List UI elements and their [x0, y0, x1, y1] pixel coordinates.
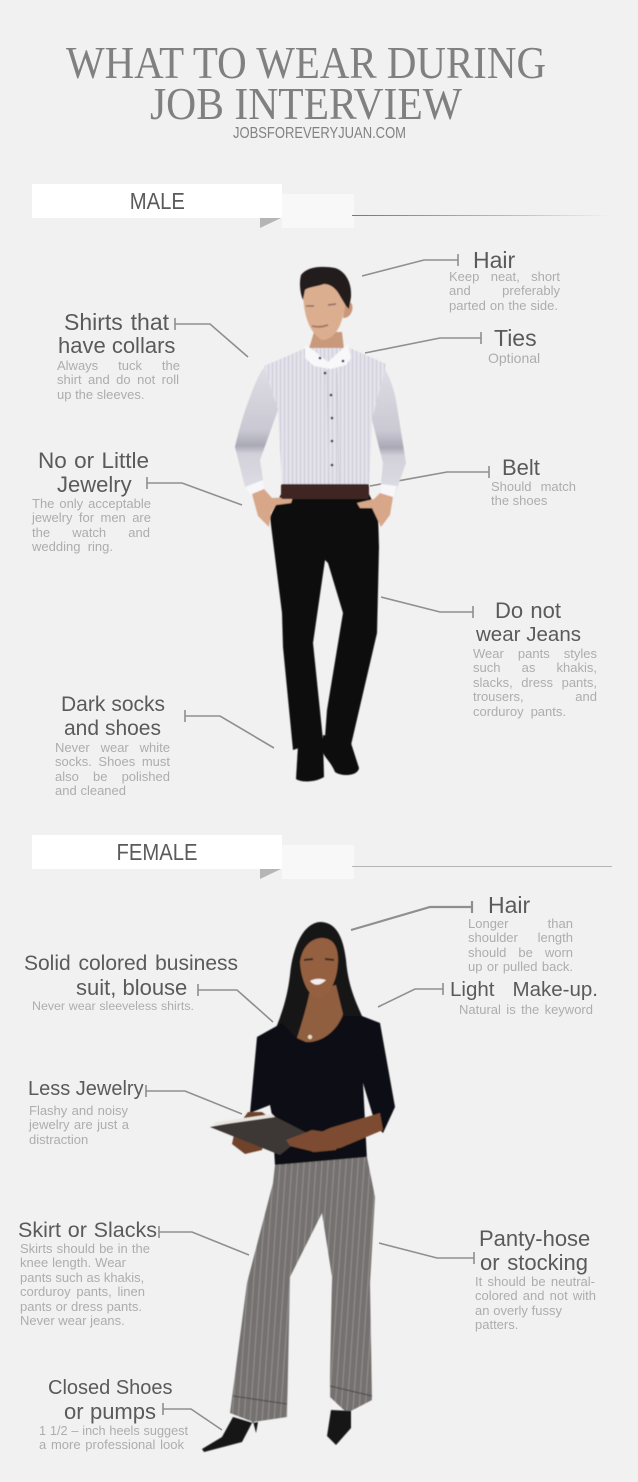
callout: male jewelry: jewelry for men are: [32, 510, 151, 525]
callout: male jeans: Do not: [495, 598, 561, 623]
callout: male socks: Dark socks: [61, 693, 165, 716]
section ribbon: female: FEMALE: [117, 839, 197, 865]
female figure: [202, 921, 396, 1453]
callout: male ties: [488, 325, 540, 366]
callout: female hosiery: patters.: [475, 1317, 518, 1332]
left sleeve: [235, 362, 284, 497]
face: [300, 938, 338, 998]
section ribbon: male: [32, 184, 596, 228]
smile: [310, 979, 326, 985]
callout: female skirt: pants or dress pants.: [20, 1299, 142, 1314]
buttons: [319, 357, 344, 466]
callout: female hair: up or pulled back.: [468, 959, 573, 974]
left hand: [232, 1112, 270, 1154]
face: [303, 283, 346, 340]
callout: male jewelry: Jewelry: [57, 472, 132, 497]
back hair: [268, 922, 362, 1076]
callout: female hosiery: or stocking: [480, 1250, 588, 1275]
belt: [281, 484, 369, 499]
callout: male belt: [491, 455, 576, 508]
callout: male belt: Belt: [502, 455, 540, 480]
collar: [305, 344, 351, 369]
callout: male shirts: up the sleeves.: [57, 387, 144, 402]
neck: [308, 332, 344, 367]
callout: female skirt: Skirt or Slacks: [18, 1218, 157, 1242]
right shoe: [327, 1410, 351, 1445]
callout: male hair: parted on the side.: [449, 298, 558, 313]
callout: female hosiery: colored and not with: [475, 1288, 596, 1303]
callout: male belt: Should match: [491, 479, 576, 494]
callout: male jeans: Wear pants styles: [473, 646, 597, 661]
callout: male jeans: slacks, dress pants,: [473, 675, 597, 690]
arrow: female skirt: [159, 1226, 249, 1255]
callout: female make-up: Light Make-up.: [450, 978, 598, 1001]
callout: male ties: Optional: [488, 350, 540, 366]
cuffs: [245, 480, 264, 497]
callout: male shirts: have collars: [58, 333, 175, 358]
callout: male belt: the shoes: [491, 493, 547, 508]
hair: [300, 267, 351, 309]
callout: female hosiery: [475, 1226, 596, 1332]
title: [66, 40, 546, 142]
callout: male jeans: wear Jeans: [476, 623, 581, 646]
callout: female hair: Hair: [488, 892, 530, 918]
arrow: male shirts: [175, 318, 248, 357]
callout: female skirt: Never wear jeans.: [20, 1313, 125, 1328]
ear: [343, 302, 353, 318]
necklace: [308, 1035, 312, 1039]
callout: female jewelry: jewelry are just a: [29, 1117, 129, 1132]
callout: male shirts: shirt and do not roll: [57, 372, 179, 387]
arrow: male belt: [370, 466, 489, 486]
callout: female skirt: [18, 1218, 157, 1328]
arrow: male hair: [362, 254, 458, 276]
callout: male jewelry: The only acceptable: [32, 496, 151, 511]
callout: female hosiery: Panty-hose: [479, 1226, 590, 1251]
right shoe: [323, 735, 359, 775]
callout: male jeans: such as khakis,: [473, 660, 597, 675]
section ribbon: male: MALE: [129, 188, 185, 214]
pinstripe trousers: [230, 1157, 375, 1422]
callout: male hair: Keep neat, short: [449, 269, 560, 284]
arrow: female make-up: [378, 983, 443, 1007]
arrow: male jewelry: [147, 477, 242, 505]
callout: male socks: socks. Shoes must: [55, 754, 170, 769]
placket: [327, 370, 339, 484]
trouser cuffs: [233, 1386, 372, 1404]
callout: female hair: Longer than: [468, 916, 573, 931]
callout: female suit: suit, blouse: [76, 975, 187, 1000]
right forearm: [308, 1113, 383, 1152]
callout: male hair: Hair: [473, 247, 515, 273]
arrow: male ties: [365, 332, 481, 353]
arrow: female hosiery: [379, 1243, 474, 1264]
right sleeve: [366, 362, 406, 500]
arrow: male socks: [185, 710, 274, 748]
callout: male jewelry: No or Little: [38, 448, 149, 473]
callout: female jewelry: [28, 1078, 144, 1147]
callout: female suit: Never wear sleeveless shirts.: [32, 999, 194, 1013]
callout: female hair: should be worn: [468, 945, 573, 960]
black top: [250, 1016, 395, 1165]
title: JOB INTERVIEW: [150, 78, 463, 129]
pants: [270, 492, 379, 750]
callout: female jewelry: distraction: [29, 1132, 88, 1147]
right hand: [286, 1130, 340, 1152]
left shoe: [296, 738, 324, 781]
callout: male shirts: [57, 309, 180, 402]
neck and chest: [297, 985, 343, 1042]
callout: female suit: Solid colored business: [24, 952, 238, 975]
callout: male jewelry: [32, 448, 151, 554]
callout: male jeans: corduroy pants.: [473, 704, 566, 719]
callout: female skirt: pants such as khakis,: [20, 1270, 144, 1285]
callout: male jewelry: wedding ring.: [32, 539, 113, 554]
callout: male socks: also be polished: [55, 769, 170, 784]
callout: female shoes: 1 1/2 – inch heels suggest: [39, 1424, 188, 1438]
callout: female skirt: Skirts should be in the: [20, 1241, 150, 1256]
title: JOBSFOREVERYJUAN.COM: [233, 125, 406, 142]
arrow: female jewelry: [146, 1085, 242, 1114]
left hand: [252, 489, 293, 527]
callout: female hosiery: It should be neutral-: [475, 1274, 595, 1289]
callout: male shirts: Always tuck the: [57, 358, 180, 373]
callout: male shirts: Shirts that: [64, 309, 169, 335]
callout: male socks: and cleaned: [55, 783, 126, 798]
arrow: female shoes: [163, 1403, 222, 1430]
callout: female jewelry: Less Jewelry: [28, 1078, 144, 1100]
callout: female shoes: or pumps: [64, 1399, 156, 1424]
callout: male socks: and shoes: [64, 717, 161, 740]
male figure: [234, 266, 406, 782]
callout: male jeans: [473, 598, 597, 719]
shirt torso: [264, 348, 386, 486]
callout: female suit: [24, 952, 238, 1013]
arrow: female hair: [351, 901, 472, 930]
section ribbon: female: [32, 835, 612, 879]
callout: female make-up: [450, 978, 598, 1017]
mouth: [312, 325, 328, 327]
callout: male ties: Ties: [494, 325, 537, 351]
callout: female hair: [468, 892, 573, 974]
callout: male socks: Never wear white: [55, 740, 170, 755]
callout: male socks: [55, 693, 170, 798]
callout: male hair: [449, 247, 560, 313]
eyes: [306, 304, 336, 306]
callout: female shoes: Closed Shoes: [48, 1377, 173, 1399]
clipboard: [210, 1115, 307, 1155]
callout: female skirt: knee length. Wear: [20, 1255, 126, 1270]
arrow: male jeans: [381, 597, 473, 618]
callout: female hair: shoulder length: [468, 930, 573, 945]
left shoe: [202, 1417, 258, 1452]
callout: female jewelry: Flashy and noisy: [29, 1103, 128, 1118]
callout: male jewelry: the watch and: [32, 525, 150, 540]
callout: female make-up: Natural is the keyword: [459, 1002, 593, 1017]
callout: male hair: and preferably: [449, 283, 560, 298]
callout: female hosiery: an overly fussy: [475, 1303, 562, 1318]
callout: male jeans: trousers, and: [473, 689, 597, 704]
callout: female shoes: a more professional look: [39, 1437, 184, 1452]
right hand: [357, 493, 393, 527]
eyes: [304, 959, 334, 960]
callout: female skirt: corduroy pants, linen: [20, 1284, 145, 1299]
callout: female shoes: [39, 1377, 188, 1452]
arrow: female suit: [198, 984, 273, 1022]
